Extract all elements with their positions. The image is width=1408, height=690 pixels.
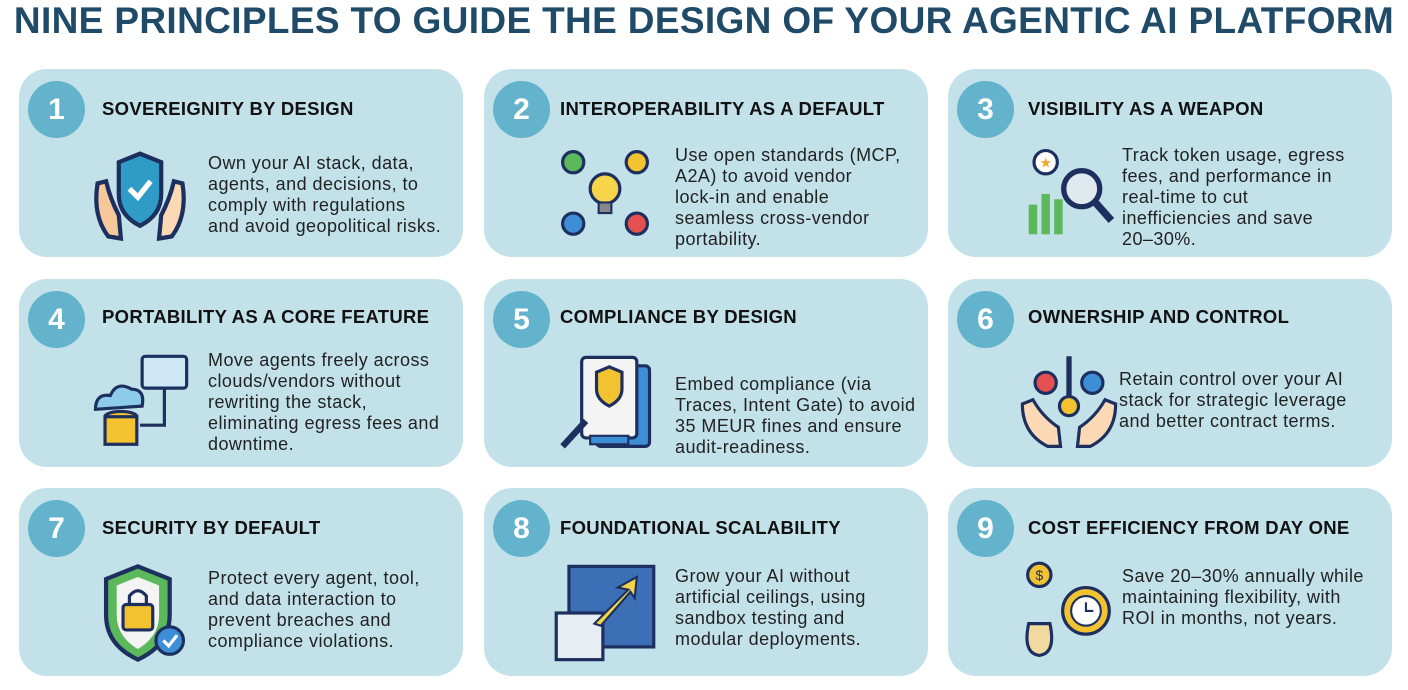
icon: document gavel <box>560 356 652 448</box>
heading: PORTABILITY AS A CORE FEATURE <box>102 306 429 327</box>
number 7: 7 <box>48 512 65 545</box>
number 2 <box>493 81 550 138</box>
text: Retain control over your AI <box>1119 369 1343 389</box>
text: Save 20–30% annually while <box>1122 566 1364 586</box>
panel: 8 scalability <box>484 488 928 676</box>
panel: 5 compliance <box>484 279 928 467</box>
icon: money clock <box>1025 562 1111 657</box>
text: 20–30%. <box>1122 229 1196 249</box>
text: artificial ceilings, using <box>675 587 866 607</box>
heading: OWNERSHIP AND CONTROL <box>1028 306 1289 327</box>
number 2: 2 <box>513 93 530 126</box>
number 5: 5 <box>513 303 530 336</box>
number 6 <box>957 291 1014 348</box>
icon: cloud monitor <box>94 354 188 446</box>
heading: VISIBILITY AS A WEAPON <box>1028 98 1263 119</box>
text: Protect every agent, tool, <box>208 568 420 588</box>
panel: 6 ownership <box>948 279 1392 467</box>
number 6: 6 <box>977 303 994 336</box>
text: Traces, Intent Gate) to avoid <box>675 395 916 415</box>
number 4: 4 <box>48 303 65 336</box>
text <box>675 145 901 249</box>
text: audit-readiness. <box>675 437 810 457</box>
text: lock-in and enable <box>675 187 829 207</box>
text <box>675 566 866 649</box>
number 8 <box>493 500 550 557</box>
text <box>1122 566 1364 628</box>
text: seamless cross-vendor <box>675 208 870 228</box>
number 1: 1 <box>48 93 65 126</box>
title: NINE PRINCIPLES TO GUIDE THE DESIGN OF YOUR AGENTIC AI PLATFORM <box>14 0 1394 41</box>
text: eliminating egress fees and <box>208 413 439 433</box>
text: Grow your AI without <box>675 566 850 586</box>
text: and better contract terms. <box>1119 411 1336 431</box>
number 4 <box>28 291 85 348</box>
text <box>208 153 441 236</box>
text: Move agents freely across <box>208 350 429 370</box>
heading: SOVEREIGNITY BY DESIGN <box>102 98 354 119</box>
text <box>208 350 439 454</box>
panel: 7 security <box>19 488 463 676</box>
text: stack for strategic leverage <box>1119 390 1347 410</box>
icon: shield hands <box>94 151 186 242</box>
panel: 3 visibility <box>948 69 1392 257</box>
heading: INTEROPERABILITY AS A DEFAULT <box>560 98 885 119</box>
text <box>675 374 916 457</box>
text: portability. <box>675 229 761 249</box>
number 3: 3 <box>977 93 994 126</box>
panel: 4 portability <box>19 279 463 467</box>
number 3 <box>957 81 1014 138</box>
text: 35 MEUR fines and ensure <box>675 416 902 436</box>
text: maintaining flexibility, with <box>1122 587 1341 607</box>
text: fees, and performance in <box>1122 166 1332 186</box>
text: Own your AI stack, data, <box>208 153 414 173</box>
icon: key hands <box>1020 356 1118 448</box>
text: sandbox testing and <box>675 608 845 628</box>
panel: 2 interoperability <box>484 69 928 257</box>
icon: shield lock <box>104 564 186 662</box>
panel: 9 cost efficiency <box>948 488 1392 676</box>
text: and avoid geopolitical risks. <box>208 216 441 236</box>
panel: 1 sovereignty <box>19 69 463 257</box>
text: clouds/vendors without <box>208 371 401 391</box>
icon: gears bulb <box>561 150 649 236</box>
heading: FOUNDATIONAL SCALABILITY <box>560 517 841 538</box>
text: Embed compliance (via <box>675 374 872 394</box>
text: A2A) to avoid vendor <box>675 166 852 186</box>
number 5 <box>493 291 550 348</box>
text: agents, and decisions, to <box>208 174 418 194</box>
number 8: 8 <box>513 512 530 545</box>
text: ROI in months, not years. <box>1122 608 1337 628</box>
text: and data interaction to <box>208 589 396 609</box>
number 9: 9 <box>977 512 994 545</box>
text: rewriting the stack, <box>208 392 367 412</box>
text: Track token usage, egress <box>1122 145 1345 165</box>
text: comply with regulations <box>208 195 405 215</box>
text <box>1119 369 1347 431</box>
icon: money clock: $ <box>1035 568 1043 583</box>
text: modular deployments. <box>675 629 861 649</box>
heading: COMPLIANCE BY DESIGN <box>560 306 797 327</box>
text: prevent breaches and <box>208 610 391 630</box>
heading: COST EFFICIENCY FROM DAY ONE <box>1028 517 1350 538</box>
text <box>208 568 420 651</box>
number 1 <box>28 81 85 138</box>
icon: chart magnifier <box>1028 149 1114 234</box>
text <box>1122 145 1345 249</box>
heading: SECURITY BY DEFAULT <box>102 517 320 538</box>
text: inefficiencies and save <box>1122 208 1313 228</box>
text: Use open standards (MCP, <box>675 145 901 165</box>
icon: scale arrow <box>554 564 656 662</box>
icon: chart magnifier: ★ <box>1040 155 1052 170</box>
text: downtime. <box>208 434 294 454</box>
text: real-time to cut <box>1122 187 1248 207</box>
number 9 <box>957 500 1014 557</box>
text: compliance violations. <box>208 631 394 651</box>
number 7 <box>28 500 85 557</box>
